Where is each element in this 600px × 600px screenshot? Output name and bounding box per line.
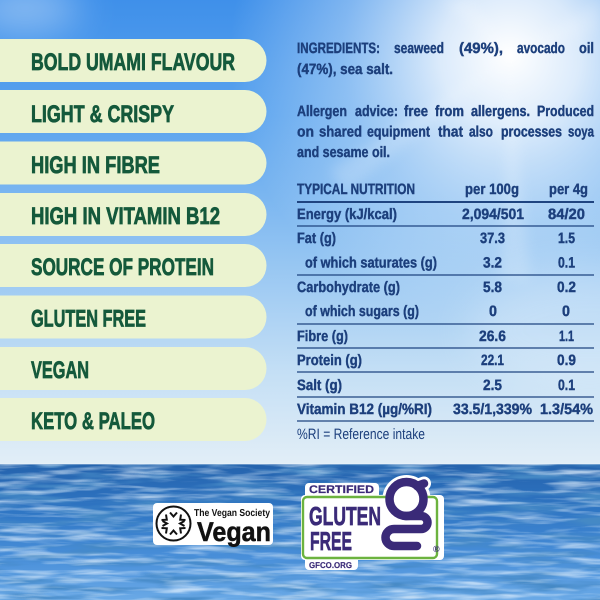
row: energy: 84/20 bbox=[548, 206, 585, 223]
row: vitamin b12 bbox=[297, 401, 594, 421]
allergen advice text: shared bbox=[319, 124, 362, 140]
badge: certified gluten free: GFCO.ORG bbox=[309, 560, 352, 570]
claim: vegan bbox=[0, 347, 266, 390]
claim: source of protein bbox=[0, 244, 266, 287]
ingredients text: avocado bbox=[517, 40, 565, 57]
allergen advice text: allergens. bbox=[471, 103, 530, 120]
allergen advice text: processes bbox=[501, 124, 562, 140]
ingredients text: INGREDIENTS: bbox=[297, 40, 380, 57]
ingredients text: (47%), sea salt. bbox=[297, 61, 393, 78]
allergen advice text: free bbox=[404, 103, 428, 120]
claim: light and crispy bbox=[0, 90, 266, 133]
allergen advice text: on bbox=[297, 124, 314, 140]
row: salt: 0.1 bbox=[558, 377, 575, 394]
badge: certified gluten free: GLUTEN bbox=[309, 501, 381, 531]
claim: high in vitamin b12: HIGH IN VITAMIN B12 bbox=[31, 203, 220, 230]
row: saturates: of which saturates (g) bbox=[305, 254, 437, 272]
claim: light and crispy: LIGHT & CRISPY bbox=[31, 101, 174, 128]
claim: high in fibre bbox=[0, 142, 266, 184]
table header bbox=[297, 181, 594, 202]
table header: per 4g bbox=[549, 181, 588, 198]
row: salt: 2.5 bbox=[483, 377, 502, 394]
badge: certified gluten free: FREE bbox=[310, 526, 352, 556]
row: salt: Salt (g) bbox=[297, 377, 342, 394]
row: sugars: 0 bbox=[489, 303, 497, 320]
claim: source of protein: SOURCE OF PROTEIN bbox=[31, 254, 214, 281]
row: protein bbox=[297, 352, 594, 372]
badge: the vegan society: The Vegan Society bbox=[194, 508, 270, 519]
claim: keto and paleo: KETO & PALEO bbox=[31, 408, 155, 435]
badge: certified gluten free: ® bbox=[433, 544, 440, 554]
row: salt bbox=[297, 377, 594, 397]
allergen advice text: from bbox=[435, 103, 464, 120]
row: carbohydrate: 5.8 bbox=[483, 279, 502, 296]
ingredients text bbox=[297, 40, 594, 78]
badge: certified gluten free: CERTIFIED bbox=[309, 484, 374, 496]
icon: vegan society star bbox=[156, 506, 190, 540]
row: protein: 0.9 bbox=[557, 352, 576, 369]
row: vitamin b12: 33.5/1,339% bbox=[453, 401, 532, 418]
row: energy bbox=[297, 206, 594, 226]
row: sugars bbox=[297, 303, 594, 324]
badge: the vegan society: Vegan bbox=[197, 517, 271, 547]
row: saturates: 3.2 bbox=[483, 254, 502, 272]
row: sugars: 0 bbox=[562, 303, 570, 320]
row: carbohydrate bbox=[297, 279, 576, 296]
row: fibre bbox=[297, 328, 594, 348]
allergen advice text bbox=[297, 103, 594, 161]
claim: high in fibre: HIGH IN FIBRE bbox=[31, 152, 160, 179]
claim: high in vitamin b12 bbox=[0, 193, 266, 236]
allergen advice text: also bbox=[469, 124, 493, 140]
row: carbohydrate: 0.2 bbox=[557, 279, 576, 296]
row: fibre: 26.6 bbox=[479, 328, 506, 345]
claim: bold umami flavour: BOLD UMAMI FLAVOUR bbox=[31, 49, 235, 76]
row: fat: 1.5 bbox=[558, 230, 575, 247]
claim: vegan: VEGAN bbox=[31, 357, 89, 384]
row: fat bbox=[297, 230, 575, 247]
claim: keto and paleo bbox=[0, 398, 266, 441]
icon: gfco g logo bbox=[386, 482, 433, 551]
row: fat: Fat (g) bbox=[297, 230, 336, 247]
badge: the vegan society bbox=[153, 503, 273, 547]
sky background bbox=[0, 0, 600, 465]
ingredients text: oil bbox=[579, 40, 594, 57]
allergen advice text: Allergen bbox=[297, 103, 347, 120]
row: vitamin b12: 1.3/54% bbox=[540, 401, 593, 418]
panel: product claims bbox=[0, 39, 266, 441]
row: energy: Energy (kJ/kcal) bbox=[297, 206, 397, 223]
row: protein: Protein (g) bbox=[297, 352, 362, 369]
allergen advice text: advice: bbox=[355, 103, 398, 120]
table header: per 100g bbox=[465, 181, 519, 198]
ingredients text: seaweed bbox=[394, 40, 444, 57]
claim: gluten free bbox=[0, 296, 266, 338]
badge: certified gluten free bbox=[301, 482, 444, 570]
row: vitamin b12: Vitamin B12 (µg/%RI) bbox=[297, 401, 432, 418]
sea background bbox=[0, 464, 600, 600]
row: saturates: 0.1 bbox=[558, 254, 575, 272]
row: saturates bbox=[297, 254, 594, 275]
row: carbohydrate: Carbohydrate (g) bbox=[297, 279, 400, 296]
allergen advice text: that bbox=[438, 124, 463, 140]
row: energy: 2,094/501 bbox=[462, 206, 524, 223]
row: protein: 22.1 bbox=[481, 352, 504, 369]
table header: TYPICAL NUTRITION bbox=[297, 181, 415, 198]
allergen advice text: and sesame oil. bbox=[297, 144, 390, 161]
claim: gluten free: GLUTEN FREE bbox=[31, 306, 146, 332]
nutrition table bbox=[297, 181, 594, 443]
claim: bold umami flavour bbox=[0, 39, 266, 82]
ingredients text: (49%), bbox=[459, 40, 503, 57]
row: sugars: of which sugars (g) bbox=[305, 303, 419, 320]
row: fibre: Fibre (g) bbox=[297, 328, 348, 345]
footnote: reference intake: %RI = Reference intake bbox=[297, 426, 425, 443]
row: fibre: 1.1 bbox=[559, 328, 574, 345]
allergen advice text: equipment bbox=[367, 124, 430, 140]
row: fat: 37.3 bbox=[480, 230, 505, 247]
